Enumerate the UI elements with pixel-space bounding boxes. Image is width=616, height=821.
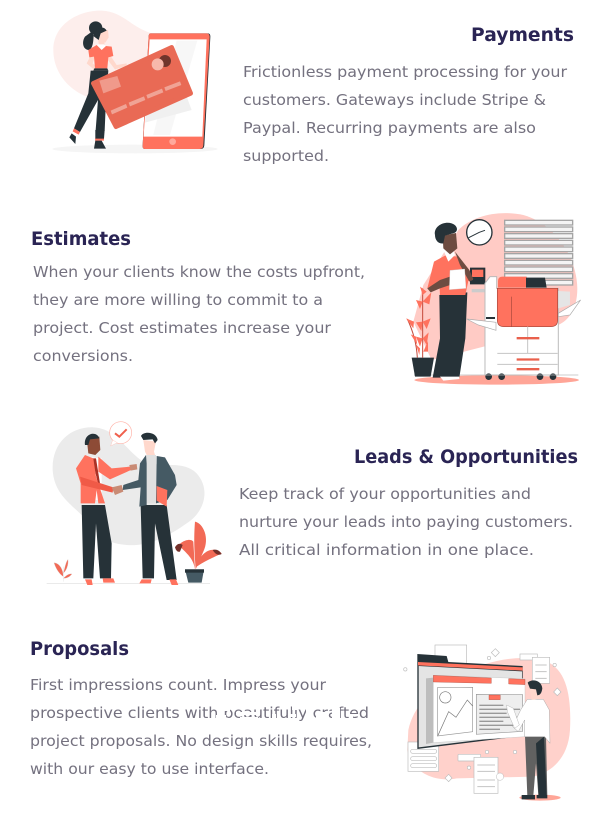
text block: leads description: nurture your leads into paying customers. <box>239 513 573 531</box>
text block: estimates description <box>33 263 365 365</box>
illustration: woman with credit card and phone <box>52 11 218 153</box>
illustration: man presenting at large screen <box>404 645 570 801</box>
text block: proposals description <box>30 676 372 778</box>
text block: proposals description: prospective clients with beautifully crafted <box>30 704 369 722</box>
heading: Payments: Payments <box>471 24 574 46</box>
text block: leads description: All critical information in one place. <box>239 541 534 559</box>
text block: proposals description: with our easy to use interface. <box>30 760 269 778</box>
text block: leads description <box>239 485 573 559</box>
text block: proposals description: First impressions count. Impress your <box>30 676 327 694</box>
text block: payments description: supported. <box>243 147 329 165</box>
text block: payments description: Paypal. Recurring payments are also <box>243 119 536 137</box>
text block: payments description: customers. Gateways include Stripe & <box>243 91 546 109</box>
text block: estimates description: project. Cost estimates increase your <box>33 319 332 337</box>
text block: payments description: Frictionless payment processing for your <box>243 63 568 81</box>
text block: estimates description: conversions. <box>33 347 133 365</box>
illustration: two people shaking hands <box>47 422 222 585</box>
heading: Leads & Opportunities: Leads & Opportunities <box>354 446 578 468</box>
text block: estimates description: they are more willing to commit to a <box>33 291 323 309</box>
heading: Proposals: Proposals <box>30 638 129 660</box>
text block: estimates description: When your clients know the costs upfront, <box>33 263 365 281</box>
heading: Estimates: Estimates <box>31 228 131 250</box>
illustration: woman at photocopier <box>406 213 581 385</box>
text block: payments description <box>243 63 568 165</box>
text block: leads description: Keep track of your opportunities and <box>239 485 531 503</box>
text block: proposals description: project proposals. No design skills requires, <box>30 732 372 750</box>
